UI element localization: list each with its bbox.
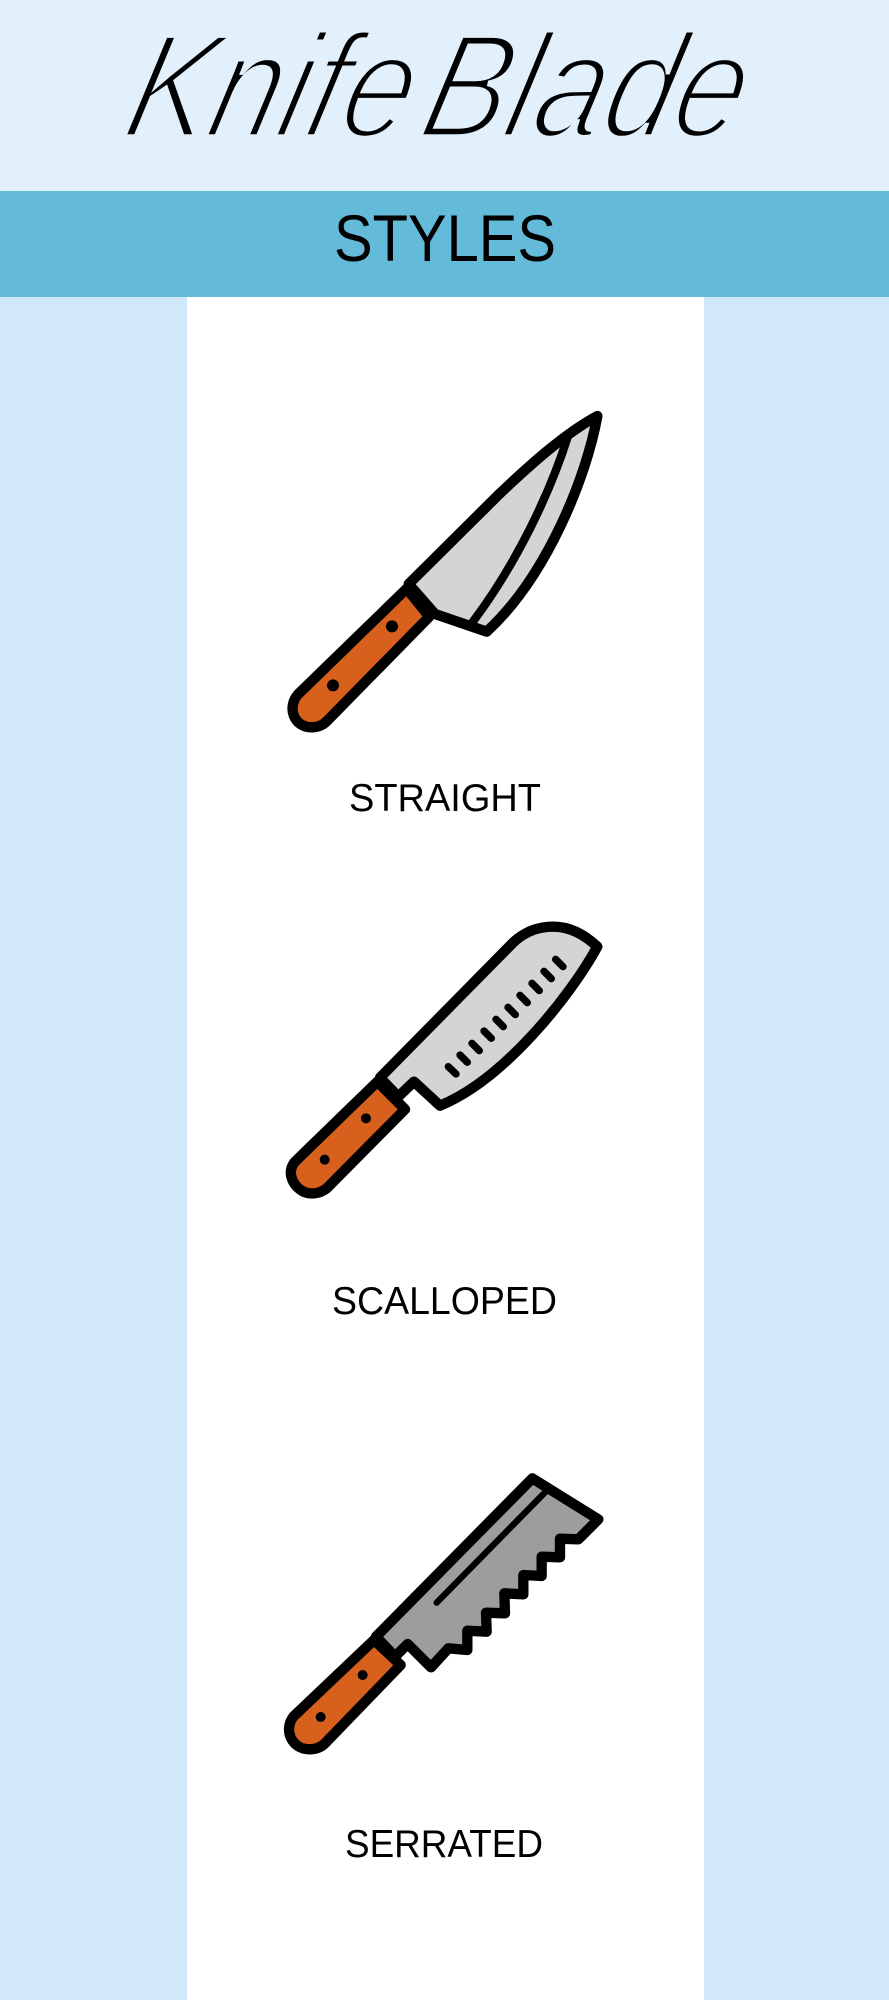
subtitle: STYLES (334, 201, 556, 275)
label: straight: STRAIGHT (349, 777, 541, 820)
title band (0, 0, 889, 191)
icon: scalloped knife (291, 927, 597, 1193)
icon: straight knife (293, 416, 597, 727)
panel: white column (187, 297, 704, 2000)
label: serrated: SERRATED (345, 1823, 543, 1866)
title: Blade (408, 3, 769, 169)
label: scalloped: SCALLOPED (332, 1280, 557, 1323)
title: Knife (112, 3, 437, 169)
icon: serrated knife (289, 1478, 598, 1749)
title (112, 3, 769, 169)
subtitle band (0, 191, 889, 297)
